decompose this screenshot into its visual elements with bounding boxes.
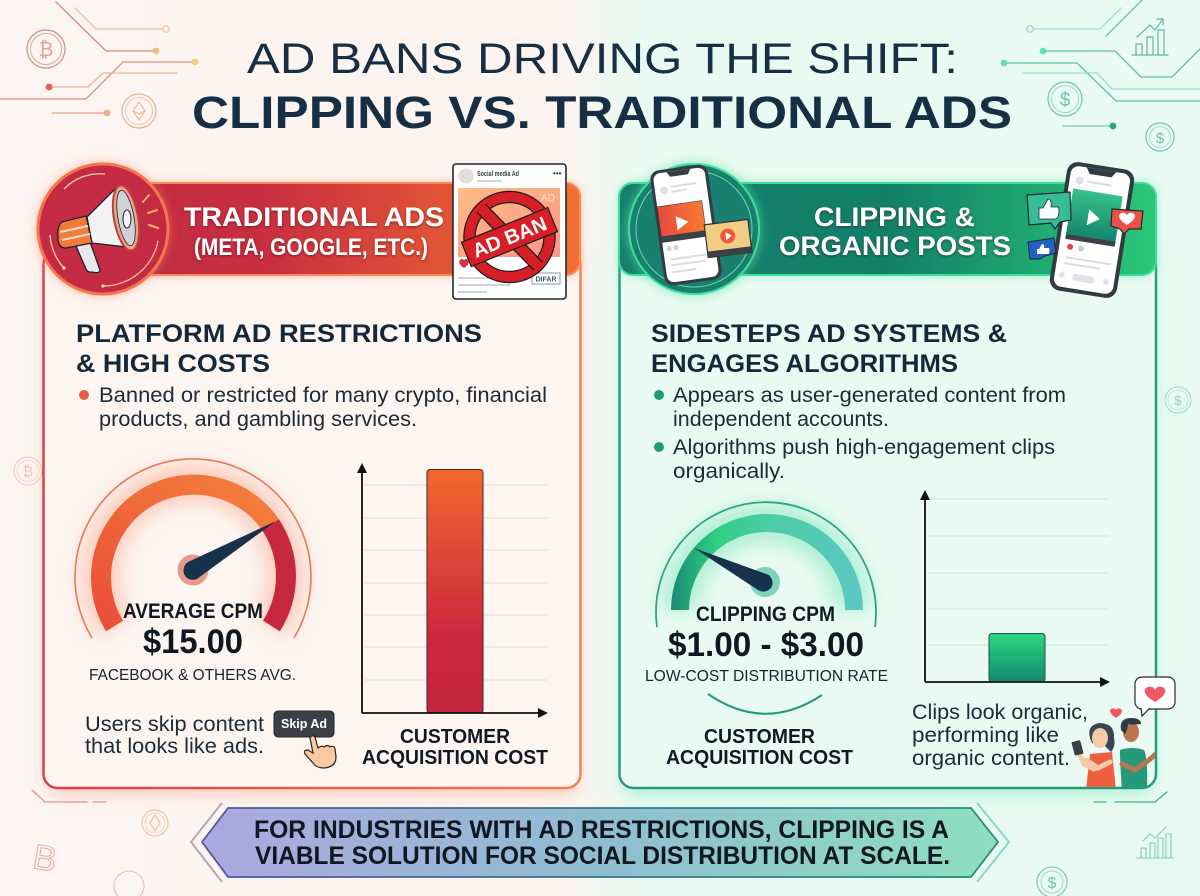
bar chart: customer acquisition cost high xyxy=(357,463,548,769)
decoration: left circuit lines and crypto coins: ₿ xyxy=(39,39,53,61)
heading: sidesteps ad systems xyxy=(651,320,1007,378)
title xyxy=(192,35,1012,138)
icon: people with phones and heart xyxy=(1071,677,1175,790)
banner: bottom conclusion: VIABLE SOLUTION FOR SOCIAL DISTRIBUTION AT SCALE. xyxy=(255,842,950,870)
text: users skip content: Users skip content xyxy=(85,713,264,736)
decoration: right circuit lines, coins and chart icons: $ xyxy=(1174,393,1182,408)
bar chart: customer acquisition cost high: CUSTOMER xyxy=(400,726,511,748)
decoration: left circuit lines and crypto coins: B xyxy=(30,837,60,880)
header band: clipping xyxy=(619,183,1156,275)
banner: bottom conclusion xyxy=(191,803,1009,882)
icon: skip ad button with hand: Skip Ad xyxy=(281,717,327,731)
icon: banned social media ad card: ••• xyxy=(553,169,562,178)
decoration: right circuit lines, coins and chart icons: $ xyxy=(1156,130,1165,147)
gauge: clipping CPM: CLIPPING CPM xyxy=(696,603,835,626)
bullet text: banned or restricted: products, and gambling services. xyxy=(99,408,417,431)
heading: platform ad restrictions: & HIGH COSTS xyxy=(76,350,270,378)
gauge: clipping CPM: ACQUISITION COST xyxy=(666,747,853,769)
text: users skip content xyxy=(85,713,264,758)
text: clips look organic: Clips look organic, xyxy=(912,701,1088,724)
header band: clipping: ORGANIC POSTS xyxy=(779,231,1011,261)
text: clips look organic: organic content. xyxy=(912,747,1070,770)
icon: banned social media ad card: DIFAR xyxy=(536,276,556,284)
icon: phone badge with video xyxy=(627,162,761,296)
decoration: right circuit lines, coins and chart icons: $ xyxy=(1060,90,1071,111)
decoration: left circuit lines and crypto coins: ₿ xyxy=(23,463,33,479)
header band: clipping: CLIPPING & xyxy=(814,202,975,232)
bar chart: customer acquisition cost low xyxy=(920,490,1110,687)
gauge: clipping CPM: $1.00 - $3.00 xyxy=(668,626,864,664)
header band: traditional ads xyxy=(92,183,580,275)
text: clips look organic: performing like xyxy=(912,724,1059,747)
header band: traditional ads: TRADITIONAL ADS xyxy=(184,202,444,232)
gauge: average CPM xyxy=(75,459,311,684)
bullet text: algorithms push clips: organically. xyxy=(673,460,785,483)
bullet text: algorithms push clips: Algorithms push high-engagement clips xyxy=(673,436,1055,459)
bullet text: user-generated content: Appears as user-generated content from xyxy=(673,384,1066,407)
icon: banned social media ad card: Social media Ad xyxy=(477,171,519,178)
gauge: average CPM: FACEBOOK & OTHERS AVG. xyxy=(89,667,296,684)
icon: banned social media ad card xyxy=(453,164,566,299)
icon: banned social media ad card: AD xyxy=(541,193,555,204)
bullet text: banned or restricted xyxy=(79,384,547,431)
bullet text: banned or restricted: Banned or restricted for many crypto, financial xyxy=(99,384,547,407)
text: users skip content: that looks like ads. xyxy=(85,735,264,758)
bullet text: user-generated content xyxy=(654,384,1066,431)
header band: traditional ads: (META, GOOGLE, ETC.) xyxy=(194,234,428,261)
icon: phone with reactions xyxy=(1027,160,1143,300)
icon: megaphone badge xyxy=(36,162,170,296)
heading: sidesteps ad systems: SIDESTEPS AD SYSTEMS & xyxy=(651,320,1007,348)
gauge: clipping CPM: LOW-COST DISTRIBUTION RATE xyxy=(645,668,888,685)
panel: traditional ads xyxy=(36,162,580,794)
heading: sidesteps ad systems: ENGAGES ALGORITHMS xyxy=(651,350,958,378)
panel: clipping and organic posts xyxy=(619,160,1175,794)
icon: banned social media ad card: AD BAN xyxy=(470,213,550,263)
gauge: clipping CPM: CUSTOMER xyxy=(704,726,816,748)
decoration: left circuit lines and crypto coins xyxy=(0,2,198,896)
text: clips look organic xyxy=(912,701,1088,770)
icon: skip ad button with hand xyxy=(274,711,336,768)
gauge: average CPM: AVERAGE CPM xyxy=(123,600,263,623)
decoration: right circuit lines, coins and chart icons: $ xyxy=(1048,875,1057,892)
decoration: right circuit lines, coins and chart icons xyxy=(1001,0,1200,896)
gauge: clipping CPM xyxy=(645,502,888,769)
bullet text: algorithms push clips xyxy=(654,436,1055,483)
title: CLIPPING VS. TRADITIONAL ADS xyxy=(192,87,1012,138)
heading: platform ad restrictions xyxy=(76,320,482,378)
bullet text: user-generated content: independent accounts. xyxy=(673,408,889,431)
gauge: average CPM: $15.00 xyxy=(143,623,243,661)
title: AD BANS DRIVING THE SHIFT: xyxy=(247,35,958,83)
bar chart: customer acquisition cost high: ACQUISITION COST xyxy=(362,747,548,769)
banner: bottom conclusion: FOR INDUSTRIES WITH AD RESTRICTIONS, CLIPPING IS A xyxy=(254,816,949,844)
heading: platform ad restrictions: PLATFORM AD RESTRICTIONS xyxy=(76,320,482,348)
